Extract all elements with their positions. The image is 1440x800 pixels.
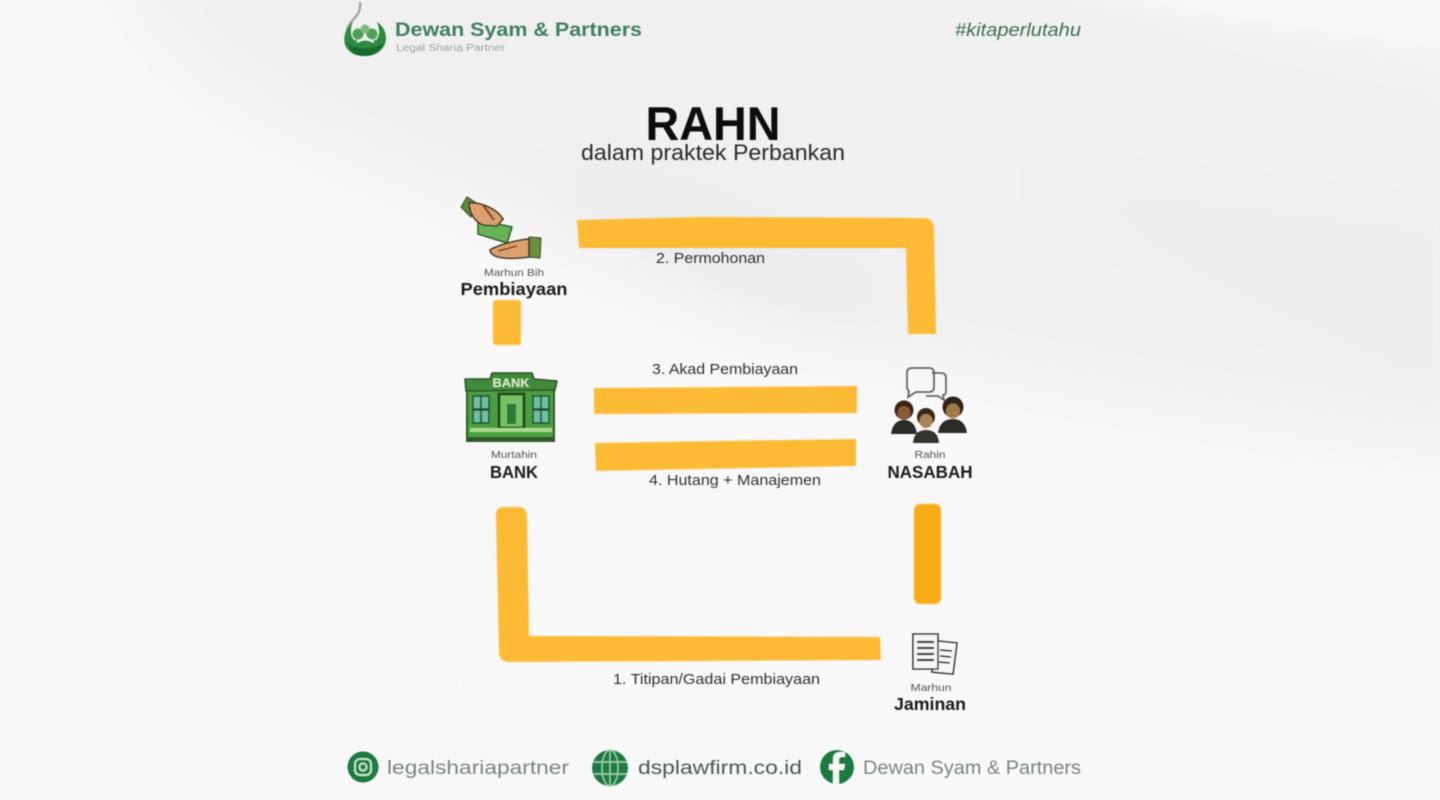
arrow: nasabah to jaminan bar [914,504,941,604]
label: BANK: BANK [490,462,538,482]
label: step 3: 3. Akad Pembiayaan [652,361,798,378]
hashtag: #kitaperlutahu [955,20,1081,40]
label: website: dsplawfirm.co.id [638,758,802,779]
label: facebook name: Dewan Syam & Partners [863,758,1081,779]
icon: bank building: BANK [492,376,530,390]
label: instagram handle: legalshariapartner [387,758,570,779]
label: step 2: 2. Permohonan [656,250,765,267]
icon: instagram [348,752,378,782]
header logo and brand [344,2,642,56]
arrow: hutang manajemen bar [595,439,856,471]
arrow: pembiayaan to bank bar [493,300,521,345]
subtitle: dalam praktek Perbankan [581,140,845,165]
icon: hands exchanging money [461,197,541,258]
icon: facebook [820,750,854,784]
label: Rahin: Rahin [914,449,946,461]
arrow: permohonan bar top right [577,217,936,334]
node: Bank [465,373,557,482]
footer: social links [348,750,1081,786]
node: Nasabah [888,368,972,482]
icon: globe [592,750,628,786]
label: step 1: 1. Titipan/Gadai Pembiayaan [613,671,820,688]
icon: logo [344,2,386,56]
arrow: akad pembiayaan bar [594,386,857,414]
label: NASABAH: NASABAH [888,462,972,482]
brand name: Dewan Syam & Partners [395,19,642,41]
title: RAHN [646,97,780,150]
icon: documents [913,634,957,674]
brand tagline: Legal Sharia Partner [396,43,506,54]
label: Jaminan: Jaminan [894,694,966,714]
label: step 4: 4. Hutang + Manajemen [649,472,821,489]
label: Marhun: Marhun [910,682,952,694]
node: Jaminan [894,634,966,714]
icon: people with speech bubbles [891,368,967,443]
arrow: titipan bar bottom left [496,507,881,662]
node: Pembiayaan [460,197,568,299]
label: Marhun Bih: Marhun Bih [484,267,544,279]
label: Pembiayaan: Pembiayaan [460,279,568,299]
label: Murtahin: Murtahin [491,449,537,461]
